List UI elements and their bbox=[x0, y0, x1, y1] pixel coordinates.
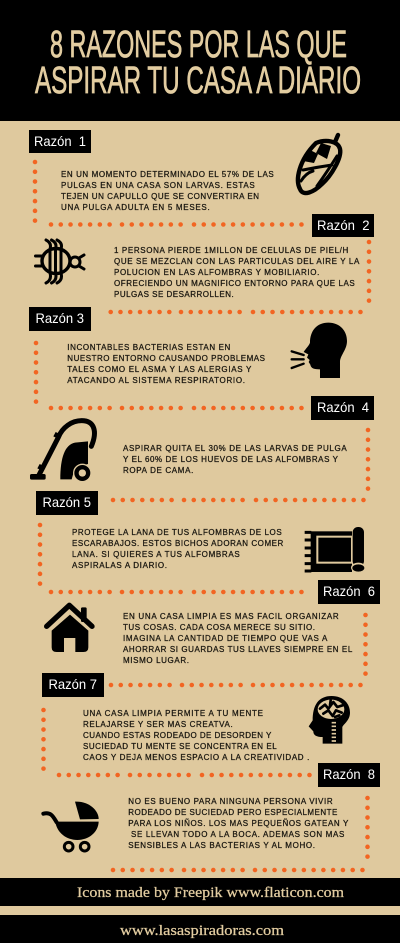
text: reason 2: PULGAS SE DESARROLLEN. bbox=[114, 290, 234, 299]
text: reason 4: Y EL 60% DE LOS HUEVOS DE LAS ALFOMBRAS Y bbox=[123, 455, 339, 464]
footer: website bbox=[0, 915, 400, 943]
text: reason 7: CAOS Y DEJA MENOS ESPACIO A LA CREATIVIDAD . bbox=[83, 753, 309, 762]
text: reason 4 bbox=[123, 444, 347, 475]
label: Razón 4: Razón 4 bbox=[317, 399, 369, 415]
text: reason 1: TEJEN UN CAPULLO QUE SE CONVERTIRA EN bbox=[61, 192, 259, 201]
text: reason 3: TALES COMO EL ASMA Y LAS ALERGIAS Y bbox=[67, 365, 252, 374]
text: reason 1: PULGAS EN UNA CASA SON LARVAS. ESTAS bbox=[61, 181, 255, 190]
icon: head breathing bbox=[292, 323, 347, 378]
label: Razón 6: Razón 6 bbox=[323, 583, 375, 599]
text: reason 2: POLUCION EN LAS ALFOMBRAS Y MOBILIARIO. bbox=[114, 268, 319, 277]
dotted path: reason 4 bbox=[113, 430, 368, 500]
dotted path: reason 3 bbox=[36, 343, 302, 408]
text: reason 1: EN UN MOMENTO DETERMINADO EL 57% DE LAS bbox=[61, 170, 274, 179]
label: Razón 8 bbox=[318, 763, 380, 787]
text: reason 5: PROTEGE LA LANA DE TUS ALFOMBRAS DE LOS bbox=[72, 528, 282, 537]
dotted path: reason 7 bbox=[44, 710, 310, 775]
text: reason 8: NO ES BUENO PARA NINGUNA PERSONA VIVIR bbox=[128, 797, 333, 806]
text: reason 3 bbox=[67, 343, 265, 385]
icon: head with brain bbox=[309, 696, 350, 744]
text: reason 3: INCONTABLES BACTERIAS ESTAN EN bbox=[67, 343, 231, 352]
dotted path: reason 5 bbox=[40, 525, 302, 592]
text: reason 5: LANA. SI QUIERES A TUS ALFOMBRAS bbox=[72, 550, 240, 559]
text: reason 7: RELAJARSE Y SER MAS CREATVA. bbox=[83, 720, 233, 729]
icon: rolled carpet bbox=[305, 527, 366, 573]
text: reason 6: AHORRAR SI GUARDAS TUS LLAVES SIEMPRE EN EL bbox=[123, 645, 353, 654]
label: Razón 7: Razón 7 bbox=[48, 676, 97, 692]
text: reason 6: EN UNA CASA LIMPIA ES MAS FACIL ORGANIZAR bbox=[123, 612, 339, 621]
dotted path: reason 6 bbox=[111, 615, 366, 685]
text: reason 5: ASPIRALAS A DIARIO. bbox=[72, 561, 167, 570]
footer: icon credit: Icons made by Freepik www.flaticon.com bbox=[77, 885, 345, 901]
title band bbox=[0, 0, 400, 121]
text: reason 4: ASPIRAR QUITA EL 30% DE LAS LARVAS DE PULGA bbox=[123, 444, 347, 453]
label: Razón 2 bbox=[312, 214, 374, 237]
text: reason 7: UNA CASA LIMPIA PERMITE A TU MENTE bbox=[83, 709, 263, 718]
text: reason 5 bbox=[72, 528, 284, 570]
label: Razón 7 bbox=[42, 673, 104, 697]
footer: icon credit bbox=[0, 878, 400, 906]
label: Razón 1 bbox=[29, 130, 91, 153]
text: reason 8 bbox=[128, 797, 349, 850]
label: Razón 5: Razón 5 bbox=[42, 494, 91, 510]
text: reason 6: TUS COSAS. CADA COSA MERECE SU SITIO. bbox=[123, 623, 315, 632]
label: Razón 4 bbox=[311, 396, 374, 420]
label: Razón 3 bbox=[29, 307, 91, 331]
icon: flea bug bbox=[36, 240, 84, 283]
text: reason 6 bbox=[123, 612, 353, 665]
text: reason 4: ROPA DE CAMA. bbox=[123, 466, 193, 475]
text: reason 1 bbox=[61, 170, 274, 212]
text: reason 2 bbox=[114, 246, 360, 299]
text: reason 7: CUANDO ESTAS RODEADO DE DESORDEN Y bbox=[83, 731, 272, 740]
text: reason 1: UNA PULGA ADULTA EN 5 MESES. bbox=[61, 203, 210, 212]
dotted path: reason 8 bbox=[113, 798, 368, 870]
text: reason 6: MISMO LUGAR. bbox=[123, 656, 189, 665]
text: reason 2: OFRECIENDO UN MAGNIFICO ENTORNO PARA QUE LAS bbox=[114, 279, 355, 288]
footer: website: www.lasaspiradoras.com bbox=[120, 923, 285, 939]
label: Razón 6 bbox=[318, 580, 380, 604]
icon: baby stroller bbox=[43, 802, 99, 851]
label: Razón 1: Razón 1 bbox=[34, 133, 86, 149]
text: reason 7: SUCIEDAD TU MENTE SE CONCENTRA EN EL bbox=[83, 742, 277, 751]
text: reason 5: ESCARABAJOS. ESTOS BICHOS ADORAN COMER bbox=[72, 539, 284, 548]
icon: house bbox=[47, 605, 92, 652]
text: reason 2: QUE SE MEZCLAN CON LAS PARTICULAS DEL AIRE Y LA bbox=[114, 257, 360, 266]
icon: vacuum cleaner bbox=[30, 421, 94, 482]
dotted path: reason 2 bbox=[111, 242, 369, 312]
text: reason 8: PARA LOS NIÑOS. LOS MAS PEQUEÑOS GATEAN Y bbox=[128, 819, 349, 828]
text: reason 8: RODEADO DE SUCIEDAD PERO ESPECIALMENTE bbox=[128, 808, 337, 817]
text: reason 3: ATACANDO AL SISTEMA RESPIRATORIO. bbox=[67, 376, 245, 385]
label: Razón 2: Razón 2 bbox=[317, 217, 370, 233]
text: reason 3: NUESTRO ENTORNO CAUSANDO PROBLEMAS bbox=[67, 354, 265, 363]
label: Razón 3: Razón 3 bbox=[36, 310, 84, 326]
text: reason 8: SENSIBLES A LAS BACTERIAS Y AL MOHO. bbox=[128, 841, 315, 850]
text: reason 6: IMAGINA LA CANTIDAD DE TIEMPO QUE VAS A bbox=[123, 634, 328, 643]
icon: pupa bbox=[298, 135, 340, 193]
text: reason 8: SE LLEVAN TODO A LA BOCA. ADEMAS SON MAS bbox=[131, 830, 344, 839]
dotted path: reason 1 bbox=[35, 162, 302, 224]
text: reason 7 bbox=[83, 709, 309, 762]
text: reason 2: 1 PERSONA PIERDE 1MILLON DE CELULAS DE PIEL/H bbox=[114, 246, 349, 255]
label: Razón 5 bbox=[36, 491, 98, 515]
label: Razón 8: Razón 8 bbox=[323, 766, 375, 782]
